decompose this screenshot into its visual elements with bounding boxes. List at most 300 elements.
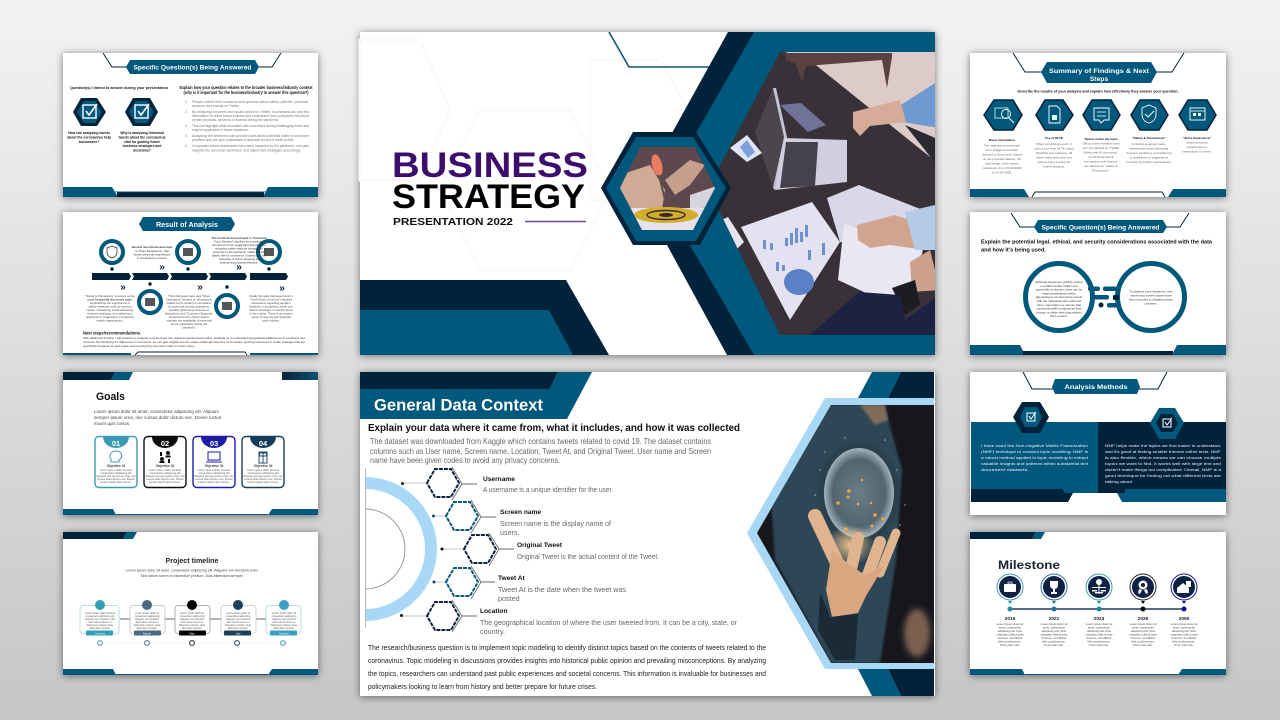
subheading: Lorem ipsum dolor sit amet, consectetur adipiscing elit. Aliquam non tincidunt enim.: [126, 568, 259, 572]
text: most frequent topic: frequent sanitizing, and adhering to: [87, 312, 133, 316]
numbered list: information to refine future policies and understand how consumers felt about: [192, 114, 309, 118]
caption 2: Why is analyzing historical: [120, 131, 164, 135]
left panel: [971, 422, 1098, 493]
timeline card October: consectetur adipiscing: [272, 615, 297, 618]
milestone 2015: Proin odio odio.: [1000, 643, 1020, 647]
icon: hexagon check 1: [73, 98, 106, 126]
milestone 2026: [1129, 574, 1157, 647]
milestone 2026: 2026: [1138, 616, 1149, 622]
milestone 2050: amet, consectetur: [1173, 626, 1195, 630]
timeline card March: Lorem ipsum dolor sit: [135, 612, 159, 615]
footer: [63, 352, 318, 355]
milestone 2021: rhoncus, vel efficitur: [1042, 636, 1066, 640]
objective card 02: 02: [161, 439, 169, 448]
timeline card October: Lorem ipsum dolor sit: [272, 612, 296, 615]
text: most frequent topic: safety measures such as wearing: [89, 304, 132, 308]
intro paragraph: name have been given codes to avoid any privacy concerns.: [370, 456, 560, 465]
timeline card May: bibendum pretium. Duis: [179, 624, 206, 627]
timeline card March: Aliquam non tincidunt: [135, 618, 159, 621]
top accents: [63, 372, 318, 380]
text: least topic: Finally the least discussed topic is: [249, 294, 293, 298]
banner: Result of Analysis: [156, 220, 218, 229]
research question paragraph: policymakers looking to learn from history and better prepare for future crises.: [368, 682, 597, 691]
objective card 02: luctus mauris quis cursus.: [150, 480, 181, 484]
text: third topic: items, particularly during the: [171, 322, 207, 326]
numbered list: 4.: [185, 134, 188, 138]
text: use of NLTK: data and get it ready for: [1038, 160, 1070, 164]
timeline card July: consectetur adipiscing: [226, 615, 251, 618]
text: basic information: date range of the tweets: [985, 162, 1019, 166]
item hexagons and connectors: [400, 467, 514, 632]
text: third topic: possibly addressing closures or: [169, 308, 209, 312]
left circle: could potentially compromise their: [1036, 307, 1082, 311]
text: fourth topic: Safety With E-commerce" underscores the: [212, 254, 267, 258]
timeline card October: bibendum pretium. Duis: [271, 624, 298, 627]
objective card 04: Objective 04: [254, 464, 273, 468]
milestone 2015: vulputate nulla at ante: [996, 632, 1024, 636]
left circle: Although tweets are publicly posted: [1035, 280, 1083, 284]
text: least topic: discussions regarding people's: [251, 301, 291, 305]
right panel: [1098, 422, 1226, 493]
description: Describe the results of your analysis and explain how effectively they answer your question.: [1018, 88, 1178, 94]
heading: and how it's being used.: [981, 248, 1046, 254]
milestone 2023: rhoncus, vel efficitur: [1087, 636, 1111, 640]
left panel: a robust method applied in topic modeling to extract: [981, 455, 1089, 460]
timeline card July: Aliquam non tincidunt: [226, 618, 250, 621]
milestone 2021: 2021: [1049, 616, 1060, 622]
label: Tweet At: posted: [498, 594, 520, 603]
text: tweets under topic: coronavirus sale finance": [1084, 160, 1118, 164]
text: store experience: "Store Experience": [1183, 136, 1212, 140]
milestone 2026: rhoncus, vel efficitur: [1131, 636, 1155, 640]
timeline card March: Sed rutrum lorem eu: [136, 621, 159, 624]
subheading: Explain your data where it came from, what it includes, and how it was collected: [368, 422, 740, 434]
objective card 01: luctus mauris quis cursus.: [101, 480, 132, 484]
right circle: been encoded to mitigate privacy: [1129, 298, 1174, 302]
text: use of NLTK: [1034, 136, 1074, 168]
banner: [103, 53, 281, 74]
banner: Specific Question(s) Being Answered: [134, 64, 252, 72]
timeline arrow bar: [92, 273, 288, 280]
paragraph: [94, 409, 221, 426]
objective card 01: Aliquam semper ipsum urna, nec: [96, 474, 136, 478]
objective card 04: luctus mauris quis cursus.: [248, 480, 279, 484]
objective card 02: cursus dolor dictum nec. Donec: [146, 477, 184, 481]
milestone 2050: 2050: [1179, 616, 1190, 622]
left circle: privacy or utilize their data without: [1036, 310, 1082, 314]
numbered list: 1.: [185, 100, 188, 104]
banner: [1011, 213, 1189, 233]
milestone 2015: amet, consectetur: [999, 626, 1021, 630]
label: Tweet At: Tweet At is the date when the tweet was: [498, 585, 626, 594]
milestone 2021: Proin odio odio.: [1044, 643, 1064, 647]
icon: analysis hexagon: [984, 100, 1022, 130]
footer: [63, 509, 318, 515]
objective card 04: consectetur adipiscing elit: [248, 471, 279, 475]
main office photo: [718, 52, 935, 335]
right panel: doesn't make things too complicated. Overall, NMF is a: [1105, 467, 1222, 472]
footer: [63, 669, 318, 675]
text: least topic: panic buying.: [262, 318, 280, 322]
left panel: valuable insights and patterns within substantial text: [981, 461, 1089, 466]
label: Screen name: Screen name: [500, 509, 541, 516]
milestone 2026: adipiscing elit. Duis: [1131, 629, 1156, 633]
text: most frequent topic: "Safety & Precautions" emerges as the: [85, 294, 135, 298]
icon: hexagon check 2: [125, 98, 158, 126]
timeline card January: bibendum pretium. Duis: [87, 624, 114, 627]
text: basic information: The data was downloaded: [984, 144, 1020, 148]
numbered list: services, and brands on Twitter.: [192, 104, 240, 108]
milestone 2015: felis condimentum.: [998, 640, 1022, 644]
milestone 2050: felis condimentum.: [1172, 640, 1196, 644]
timeline circles: [101, 241, 280, 317]
text: safety and precautions: [1126, 136, 1172, 164]
milestone 2023: amet, consectetur: [1088, 626, 1110, 630]
icon: shield hexagon: [1131, 100, 1168, 130]
caption 2: tweets about the coronavirus: [118, 136, 166, 140]
milestone 2021: vulputate nulla at ante: [1040, 632, 1068, 636]
timeline card March: bibendum pretium. Duis: [134, 624, 161, 627]
right panel: good technique for finding out what different texts are: [1105, 473, 1222, 478]
text: use of NLTK: Use of NLTK: [1045, 136, 1064, 140]
text: safety and precautions: maintaining social distancing,: [1129, 146, 1169, 150]
timeline card May: [175, 600, 210, 636]
right circle: concerns.: [1144, 302, 1158, 306]
objective card 01: [95, 436, 137, 488]
next steps text: With additional funding, I will expand my analysis to delve deep into regional specific tweet topics, enabling us to understand geographical differences in sentiment and: [83, 336, 305, 340]
subheading: Sed rutrum lorem eu bibendum pretium. Duis bibendum semper.: [140, 574, 244, 578]
slide: Result of Analysis: [63, 212, 318, 355]
numbered list: certain products, services, or brands during the pandemic.: [192, 118, 279, 122]
left circle: on platforms like Twitter and: [1040, 284, 1078, 288]
heading: Project timeline: [166, 558, 219, 565]
text: third topic: related to the impact of coronavirus: [166, 301, 212, 305]
concentric arc graphic: [365, 468, 437, 628]
objective card 04: cursus dolor dictum nec. Donec: [244, 477, 282, 481]
text: basic information: from Kaggle and further: [986, 148, 1018, 152]
chevrons: »: [159, 262, 165, 273]
paragraph: Lorem ipsum dolor sit amet, consectetur adipiscing elit. Aliquam: [94, 409, 220, 414]
text: safety and precautions: provided by health organizations.: [1126, 160, 1172, 164]
text: third topic: Third discussed topic was "Store: [168, 294, 210, 298]
right panel: NMF helps make the topics we find easier to understand,: [1105, 443, 1221, 448]
text: fourth topic: [211, 236, 267, 264]
dark diagonal band: [667, 32, 754, 355]
text: third topic: Operations" focuses on discussions: [166, 298, 212, 302]
numbered list: By analyzing concerns and issues raised on Twitter, businesses can use this: [192, 110, 309, 114]
objective card 03: Aliquam semper ipsum urna, nec: [194, 474, 234, 478]
numbered list: insights into consumer sentiment, and adjust their strategies accordingly.: [192, 148, 301, 152]
caption 1: [67, 131, 111, 144]
left circle: legal complications when: [1042, 291, 1076, 295]
objective card 01: consectetur adipiscing elit: [101, 471, 132, 475]
timeline card March: bibendum semper.: [137, 627, 158, 630]
next steps text: specifically designed for each region and ensuring they are better ready for future crises.: [83, 344, 195, 348]
light blue hexagon frame: [747, 398, 934, 669]
label: Screen name: users.: [500, 528, 520, 537]
milestone 2021: felis condimentum.: [1042, 640, 1066, 644]
milestone 2015: rhoncus, vel efficitur: [998, 636, 1022, 640]
numbered list: This can highlight what resonated with customers during challenging times and: [192, 124, 309, 128]
timeline card October: October: [279, 631, 289, 635]
objective card 01: Objective 01: [107, 464, 126, 468]
right panel: is also flexible, which means we can choose multiple: [1105, 455, 1222, 460]
text: use of NLTK: WordNet (Lemmatizer). All: [1036, 151, 1072, 155]
arrows: [120, 618, 266, 620]
faint hexagon background pattern: [360, 40, 700, 270]
banner: Steps: [1090, 76, 1108, 83]
label: Location: [480, 608, 738, 636]
text: fourth topic: response to the pandemic, called "Health: [213, 250, 266, 254]
milestone 2050: adipiscing elit. Duis: [1172, 629, 1197, 633]
text: most frequent topic: guidelines or suggestions provided by: [86, 315, 135, 319]
timeline markers: [98, 641, 285, 645]
objective card 04: 04: [259, 439, 268, 448]
milestone 2023: vulputate nulla at ante: [1085, 632, 1113, 636]
objective card 03: [193, 436, 235, 488]
label: Username: Username: [483, 476, 515, 483]
bottom left shapes: [360, 280, 609, 355]
heading: Goals: [96, 391, 125, 403]
right circle: To address such situations, user: [1130, 290, 1172, 294]
title text: PRESENTATION 2022: [393, 217, 514, 228]
footer: [970, 189, 1226, 197]
text: third topic: underscores the critical need to: [169, 315, 209, 319]
milestone 2021: Lorem ipsum dolor sit: [1041, 622, 1068, 626]
numbered list: 5.: [185, 144, 188, 148]
label: Original Tweet: [517, 542, 659, 561]
text: most frequent topic: [85, 294, 135, 322]
intro paragraph: The dataset was downloaded from Kaggle which contains tweets related to covid 19. The dataset contains: [370, 437, 711, 446]
milestone 2050: [1170, 574, 1198, 647]
numbered list: Analyzing the sentiment can provide clues about potential shifts in consumer: [192, 134, 310, 138]
slide: Milestone: [970, 532, 1226, 675]
text: fourth topic: The fourth discussed topic is "Forecast/: [211, 236, 267, 240]
timeline card July: [221, 600, 256, 636]
text: basic information: Basic information: [989, 138, 1015, 142]
research question paragraph: The research/business question is to implement topic modeling to identify distinct topics based on the contents of tweets related to the: [368, 643, 766, 652]
connector bars: [1088, 286, 1121, 308]
next steps text: [83, 330, 305, 348]
objective card 02: [144, 436, 186, 488]
text: least topic: sense of urgency and potential: [251, 315, 291, 319]
chevrons: »: [279, 283, 285, 294]
milestone 2050: Lorem ipsum dolor sit: [1171, 622, 1198, 626]
text: safety and precautions: frequent sanitizing, and adhering: [1127, 151, 1172, 155]
text: basic information: [982, 138, 1023, 174]
right circle: [1118, 264, 1184, 330]
timeline card January: January: [95, 631, 106, 635]
left circle: [1026, 264, 1092, 330]
text: safety and precautions: "Safety & Precautions": [1132, 136, 1166, 140]
objective card 03: Lorem ipsum dolor sit amet: [198, 468, 230, 472]
caption 2: vital for guiding future: [124, 140, 160, 144]
text: least topic: in the market. There is an evident: [250, 312, 293, 316]
objective card 01: Lorem ipsum dolor sit amet: [100, 468, 132, 472]
icon: document hexagon: [1036, 100, 1073, 130]
numbered list: priorities and can give businesses a historical record of weak points.: [192, 138, 294, 142]
text: tweets under topic: "Shop online-Aviation-Loan: [1082, 142, 1120, 146]
banner: [139, 217, 235, 231]
objective card 02: Lorem ipsum dolor sit amet: [149, 468, 181, 472]
icon: message hexagon: [1083, 100, 1120, 130]
banner: Summary of Findings & Next: [1049, 68, 1150, 75]
text: third topic: disruptions, and "Customer Supports": [165, 312, 213, 316]
chevrons: »: [236, 262, 242, 273]
timeline card March: consectetur adipiscing: [135, 615, 160, 618]
timeline card May: May: [189, 631, 195, 635]
text: least topic: "Food Stock Concerns" indicates: [250, 298, 293, 302]
objective card 01: 01: [112, 439, 120, 448]
milestone 2023: Lorem ipsum dolor sit: [1086, 622, 1113, 626]
timeline card January: Aliquam non tincidunt enim: [85, 618, 115, 621]
text: second topic: shows personal experiences: [134, 252, 171, 256]
caption 2: decisions?: [133, 148, 151, 152]
text: basic information: collected is from 16-03-2020: [982, 166, 1022, 170]
timeline card October: bibendum semper.: [274, 627, 295, 630]
subheading: [126, 568, 259, 578]
milestone 2021: [1040, 574, 1068, 647]
right heading: (why is it important for the business/industry to answer this question?): [184, 90, 309, 95]
chevrons: [120, 262, 285, 294]
milestone 2050: Proin odio odio.: [1174, 643, 1194, 647]
slide: Summary of Findings & Next Steps: [970, 53, 1226, 197]
text: fourth topic: necessity of online shopping for: [219, 257, 259, 261]
banner: Specific Question(s) Being Answered: [1042, 224, 1160, 232]
next steps text: Next steps/recommendations: [83, 330, 141, 336]
objective card 03: luctus mauris quis cursus.: [199, 480, 230, 484]
caption 1: businesses?: [79, 140, 99, 144]
research question paragraph: [368, 643, 766, 691]
text: most frequent topic: masks, maintaining social distancing,: [86, 308, 134, 312]
slide: Specific Question(s), legal considerations: [970, 212, 1226, 355]
top accent: [970, 532, 1045, 539]
timeline card July: Lorem ipsum dolor sit: [226, 612, 250, 615]
text: second topic: [132, 245, 173, 260]
timeline card July: bibendum semper.: [228, 627, 249, 630]
left panel: document datasets.: [981, 467, 1029, 472]
label: Original Tweet: Original Tweet is the actual content of the Tweet.: [517, 552, 659, 561]
milestone 2021: amet, consectetur: [1043, 626, 1065, 630]
text: tweets under topic: are labeled as "Safety &: [1084, 164, 1118, 168]
text: most frequent topic: emphasizing the significance of: [90, 301, 130, 305]
milestone 2026: Proin odio odio.: [1133, 643, 1153, 647]
intro paragraph: columns such as User name, Screen name, Location, Tweet At, and Original Tweet. User name and Screen: [370, 447, 711, 456]
text: third topic: [165, 294, 213, 330]
milestone 2023: [1085, 574, 1113, 647]
timeline card July: bibendum pretium. Duis: [225, 624, 252, 627]
label: Username: A username is a unique identifier for the user.: [483, 485, 613, 494]
objective card 03: Objective 03: [205, 464, 224, 468]
milestone 2050: rhoncus, vel efficitur: [1172, 636, 1196, 640]
heading: [981, 240, 1213, 254]
text: fourth topic: demand for food, suggesting that people's: [212, 243, 266, 247]
text: fourth topic: shopping habits might be changing in: [215, 246, 263, 250]
timeline card May: Lorem ipsum dolor sit: [180, 612, 204, 615]
right heading: Explain how your question relates to the broader business/industry context: [180, 85, 313, 90]
caption 2: business strategies and: [123, 144, 161, 148]
left panel: (NMF) technique to conduct topic modeling. NMF is: [981, 449, 1088, 454]
timeline card May: consectetur adipiscing: [180, 615, 205, 618]
objective card 03: 03: [210, 439, 218, 448]
right panel: topics we want to find. It works well with large text and: [1105, 461, 1221, 466]
text: safety and precautions: to guidelines or suggestions: [1130, 156, 1169, 160]
text: use of NLTK: uses a tool from NLTK called: [1034, 146, 1074, 150]
timeline card March: March: [143, 631, 151, 635]
banner: Analysis Methods: [1064, 384, 1128, 391]
intro paragraph: [370, 437, 711, 465]
objective card 02: consectetur adipiscing elit: [150, 471, 181, 475]
left circle: accessible to anyone, there can be: [1036, 288, 1083, 292]
text: third topic: maintain the availability of essential: [166, 318, 212, 322]
timeline card October: Aliquam non tincidunt: [272, 618, 296, 621]
title text: STRATEGY: [392, 178, 585, 216]
milestone 2021: adipiscing elit. Duis: [1042, 629, 1067, 633]
milestone 2023: 2023: [1094, 616, 1105, 622]
numbered list: may be applicable in future situations.: [192, 128, 249, 132]
text: most frequent topic: most frequently discussed topic,: [87, 298, 133, 302]
timeline card January: Lorem ipsum dolor sit amet: [85, 612, 115, 615]
text: basic information: to 14-04-2020.: [992, 170, 1012, 174]
timeline card May: bibendum semper.: [182, 627, 203, 630]
text: second topic: is "Store Experience", that: [135, 249, 169, 253]
text: fourth topic: maintaining physical distance.: [220, 260, 258, 264]
milestone 2015: Lorem ipsum dolor sit: [997, 622, 1024, 626]
milestone 2023: adipiscing elit. Duis: [1087, 629, 1112, 633]
text: least topic: behavior in stockpiling, which can: [250, 304, 293, 308]
timeline card January: [80, 600, 119, 636]
header band: General Data Context: [374, 396, 543, 414]
milestone 2026: felis condimentum.: [1131, 640, 1155, 644]
right panel: talking about: [1105, 479, 1133, 484]
research question paragraph: the topics, researchers can understand past public experiences and societal concerns. This information is invaluable for businesses and: [368, 669, 766, 678]
milestone 2026: vulputate nulla at ante: [1129, 632, 1157, 636]
objective card 02: Aliquam semper ipsum urna, nec: [145, 474, 185, 478]
numbered list: People voiced their concerns and opinions about safety, policies, products,: [192, 100, 309, 104]
milestone 2026: amet, consectetur: [1132, 626, 1154, 630]
timeline card October: [266, 600, 301, 636]
footer: [970, 669, 1226, 675]
label: Original Tweet: Original Tweet: [517, 542, 563, 549]
milestone 2015: 2015: [1005, 616, 1016, 622]
label: Location: The geographical location of where the user tweeted from. It can be a city, state, or: [480, 618, 738, 627]
objective card 04: Aliquam semper ipsum urna, nec: [243, 474, 283, 478]
label: Username: [483, 476, 613, 494]
text: second topic: or interactions in stores.: [137, 256, 168, 260]
milestone 2015: [996, 574, 1024, 647]
text: least topic: [249, 294, 293, 322]
label: Tweet At: [498, 575, 626, 603]
chevrons: »: [197, 282, 203, 293]
timeline card May: Sed rutrum lorem eu: [181, 621, 204, 624]
milestone 2023: felis condimentum.: [1087, 640, 1111, 644]
hexagon dart photo: [620, 147, 715, 230]
label: Screen name: Screen name is the display name of: [500, 519, 611, 528]
text: use of NLTK: further analysis.: [1043, 164, 1065, 168]
numbered list: 2.: [185, 110, 188, 114]
text: use of NLTK: When simplifying words, it: [1036, 142, 1072, 146]
top outline accent: [609, 32, 709, 67]
slide: General Data Context: [299, 372, 940, 696]
banner: [1013, 53, 1184, 83]
objective card 03: consectetur adipiscing elit: [199, 471, 230, 475]
text: basic information: reduced to 50 records. Based: [982, 152, 1023, 156]
text: third topic: pandemic.: [182, 326, 196, 330]
footer band: [63, 187, 318, 197]
text: store experience: Share personal: [1187, 140, 1208, 144]
slide: Project timeline: [63, 532, 318, 675]
footer: [970, 345, 1226, 355]
